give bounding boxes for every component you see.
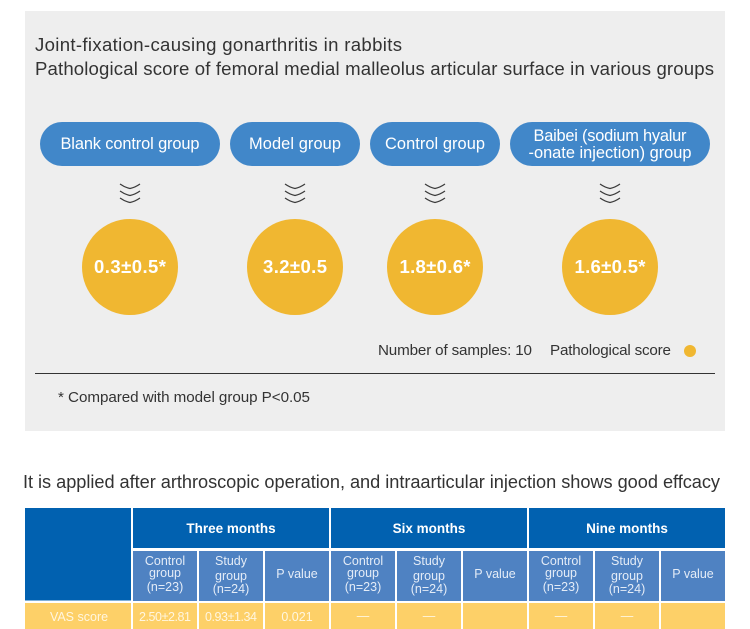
score: control [387,219,483,315]
sub-headers: three months: Control [145,554,185,568]
title: Pathological score of femoral medial malleolus articular surface in various groups [35,58,714,79]
legend [378,342,696,359]
panel: rabbit study [25,11,725,431]
sub-headers: nine months: P value [672,567,714,581]
row: VAS score: 0.021 [281,610,313,624]
header: six months: Six months [393,521,465,536]
row: VAS score: — [357,609,370,623]
header: nine months [529,508,725,548]
score: model: 3.2±0.5 [263,256,327,277]
score: model [247,219,343,315]
sub-headers: six months: group [413,569,445,583]
sub-headers: nine months: Control [541,554,581,568]
header: three months [133,508,329,548]
sub-headers: nine months: (n=24) [609,582,645,596]
sub-headers: three months: (n=23) [147,580,183,594]
pill: Baibei group: -onate injection) group [528,144,692,162]
title [35,34,714,79]
pill: Baibei group: Baibei (sodium hyalur [534,127,687,145]
row: VAS score [25,603,725,629]
score: Baibei [562,219,658,315]
score: control: 1.8±0.6* [400,256,471,277]
sub-headers: six months: Study [413,554,446,568]
sub-headers: six months [331,551,527,601]
legend: Pathological score [550,342,671,359]
icon: chevrons 2 [285,184,305,202]
sub-headers: three months: Study [215,554,248,568]
pill: control group: Control group [385,135,485,153]
table: efficacy over time [25,508,725,629]
row: VAS score: — [621,609,634,623]
title: Joint-fixation-causing gonarthritis in rabbits [35,34,402,55]
row: VAS score: 2.50±2.81 [139,610,191,624]
score: blank control: 0.3±0.5* [94,256,167,277]
score: blank control [82,219,178,315]
sub-headers: six months: P value [474,567,516,581]
row: VAS score: — [423,609,436,623]
sub-headers: nine months: Study [611,554,644,568]
sub-headers: three months [133,551,329,601]
row: VAS score: 0.93±1.34 [205,610,257,624]
pill: Baibei group [510,122,710,166]
sub-headers: nine months: group [545,566,577,580]
sub-headers: six months: (n=24) [411,582,447,596]
icon: chevrons 3 [425,184,445,202]
pill: model group: Model group [249,135,341,153]
sub-headers: six months: Control [343,554,383,568]
sub-headers: three months: (n=24) [213,582,249,596]
header: three months: Three months [186,521,276,536]
sub-headers: nine months [529,551,725,601]
header: six months [331,508,527,548]
sub-headers: three months: group [149,566,181,580]
sub-headers: three months: P value [276,567,318,581]
footnote: * Compared with model group P<0.05 [58,389,310,406]
pill: blank control group: Blank control group [60,135,200,153]
header: nine months: Nine months [586,521,668,536]
row: VAS score: VAS score [50,610,108,624]
row: VAS score: — [555,609,568,623]
sub-headers: three months: group [215,569,247,583]
sub-headers: six months: group [347,566,379,580]
heading: arthroscopic efficacy: It is applied after arthroscopic operation, and intraarticular injection shows good effcacy [23,472,721,492]
pill: model group [230,122,360,166]
icon: chevrons 1 [120,184,140,202]
legend: Number of samples: 10 [378,342,532,359]
sub-headers: nine months: (n=23) [543,580,579,594]
sub-headers: nine months: group [611,569,643,583]
icon: chevrons 4 [600,184,620,202]
sub-headers: six months: (n=23) [345,580,381,594]
pill: blank control group [40,122,220,166]
pill: control group [370,122,500,166]
score: Baibei: 1.6±0.5* [574,256,646,277]
